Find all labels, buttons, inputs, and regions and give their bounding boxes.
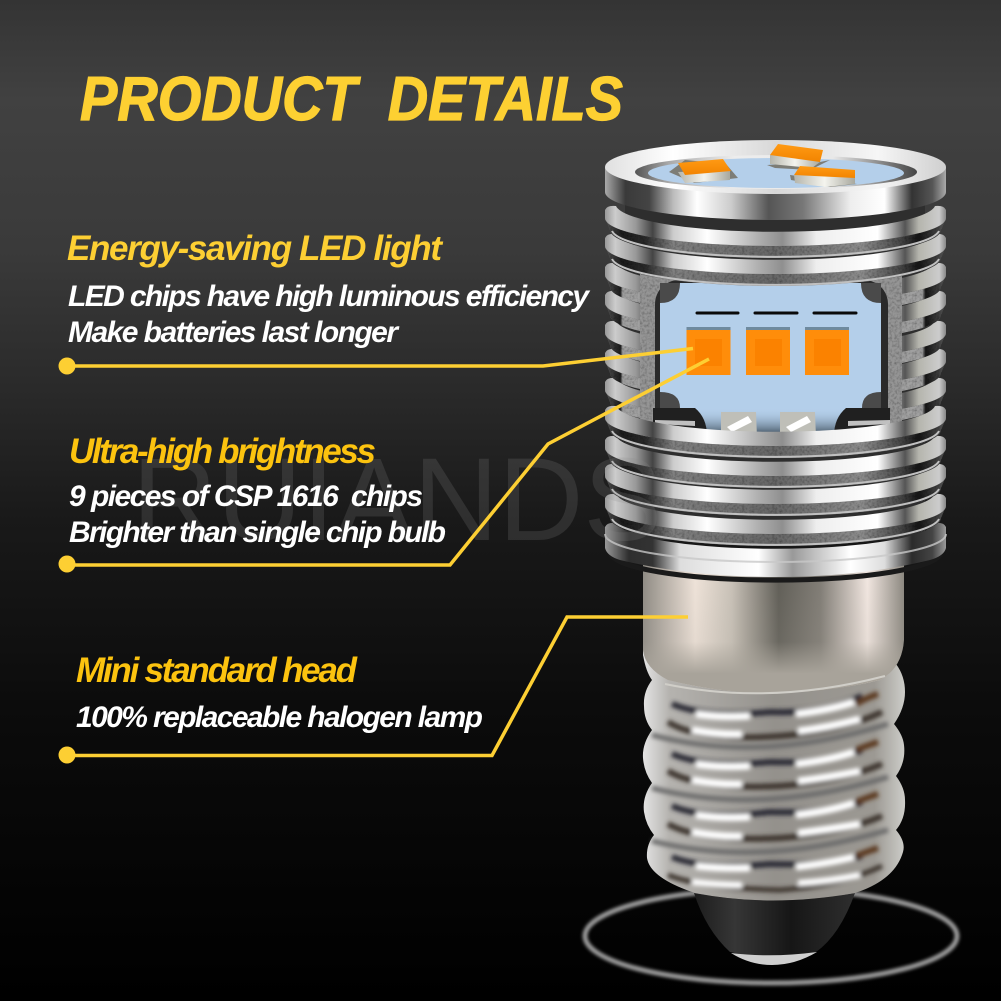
bulb bbox=[605, 140, 946, 965]
right solder tab bbox=[834, 408, 890, 436]
left solder tab bbox=[653, 408, 707, 436]
neck bbox=[643, 565, 904, 693]
lower fins bbox=[605, 436, 946, 546]
left tab highlight bbox=[655, 420, 695, 426]
thread turn 4 highlights bbox=[668, 848, 882, 890]
polarity marks bbox=[697, 312, 856, 314]
right tab highlight bbox=[848, 420, 890, 426]
contact tip bbox=[694, 893, 855, 965]
fin below panel bbox=[605, 406, 946, 458]
thread turn 1 highlights bbox=[652, 694, 888, 747]
leader line bbox=[58, 617, 688, 764]
chip 2 bbox=[746, 327, 790, 375]
heading: Mini standard head bbox=[76, 651, 358, 690]
heading: Ultra-high brightness bbox=[69, 432, 376, 471]
description line 2: Brighter than single chip bulb bbox=[69, 516, 446, 549]
glowing ring under the bulb bbox=[585, 889, 957, 983]
description line 1: LED chips have high luminous efficiency bbox=[68, 280, 590, 313]
panel corner notches bbox=[660, 283, 881, 408]
leader line bbox=[58, 359, 709, 572]
description: 100% replaceable halogen lamp bbox=[76, 701, 483, 734]
description line 1: 9 pieces of CSP 1616 chips bbox=[69, 480, 423, 513]
chip 1 bbox=[686, 327, 730, 375]
LED panel bbox=[653, 283, 890, 438]
top cap bbox=[605, 140, 946, 220]
bottom cap fin bbox=[605, 523, 946, 580]
heat sink core bbox=[625, 200, 925, 540]
feature block: energy-saving bbox=[58, 229, 693, 374]
feature block: brightness bbox=[58, 359, 709, 572]
leader line bbox=[58, 348, 693, 374]
heading: Energy-saving LED light bbox=[67, 229, 443, 268]
upper fins bbox=[605, 206, 946, 286]
feature block: mini head bbox=[58, 617, 688, 764]
description line 2: Make batteries last longer bbox=[68, 316, 400, 349]
chip 3 bbox=[805, 327, 849, 375]
top LED chip left bbox=[669, 159, 738, 183]
solder pads bbox=[721, 412, 816, 438]
screw base bbox=[643, 575, 905, 900]
thread turn 2 highlights bbox=[652, 742, 888, 800]
watermark: RUIANDS bbox=[132, 434, 662, 566]
top LED chip right bbox=[790, 166, 857, 187]
side fins beside the LED panel bbox=[605, 263, 946, 430]
LED panel frame bbox=[640, 272, 902, 437]
title: PRODUCT DETAILS bbox=[80, 65, 623, 134]
thread turn 3 highlights bbox=[652, 794, 888, 852]
top LED chip back bbox=[767, 144, 830, 170]
